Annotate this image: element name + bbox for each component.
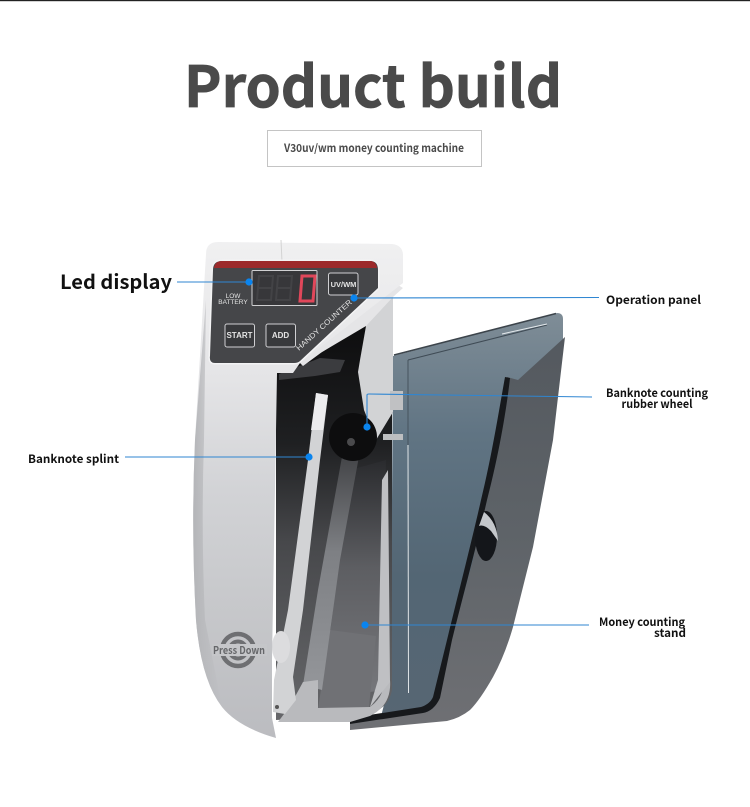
label: banknote counting rubber wheel: Banknote counting [606,385,708,401]
light band beside splint [303,440,362,690]
led display [252,270,317,306]
label: banknote splint [28,451,313,467]
press down logo [212,634,267,666]
press down logo: Press Down [213,643,265,658]
start button: START [226,331,253,340]
wheel brackets [383,434,403,440]
label: banknote splint: Banknote splint [28,451,119,467]
label: money counting stand: Money counting [599,614,685,630]
label: banknote counting rubber wheel [363,385,708,431]
red strip [214,261,377,268]
front flap of cover [350,337,565,730]
right silver strip [370,470,390,707]
label: operation panel [350,292,701,308]
control panel [210,261,378,363]
banknote splint [273,393,328,714]
title: Product build [184,42,562,124]
rear transparent cover [380,313,563,720]
label: led display [60,266,253,295]
handy counter label: HANDY COUNTER [294,297,354,352]
dark flap edge [350,377,510,724]
label: banknote counting rubber wheel: rubber wheel [622,396,693,412]
rubber wheel [329,413,377,461]
top border line [0,0,750,1]
machine interior [276,325,392,720]
silver tray base [278,680,390,722]
right inner column [358,293,393,440]
start button [225,324,254,347]
control panel: BATTERY [218,299,248,306]
add button: ADD [272,331,289,340]
upper bar under panel [300,285,403,366]
money counting machine illustration [193,240,565,738]
label: money counting stand [361,614,686,641]
tray center [322,460,386,700]
uv/wm button [328,273,358,295]
machine outer casing [193,242,403,738]
low battery label: LOW [226,293,241,300]
grey ledge under panel [279,358,345,380]
label: money counting stand: stand [654,625,686,641]
subtitle box [268,130,482,166]
cover knob [475,511,497,561]
label: led display: Led display [60,266,172,295]
splint hinge [272,631,290,663]
label: operation panel: Operation panel [606,292,701,308]
lower tray plate [318,630,376,709]
subtitle box: V30uv/wm money counting machine [283,140,464,156]
add button [266,324,296,347]
uv/wm button: UV/WM [331,280,356,289]
